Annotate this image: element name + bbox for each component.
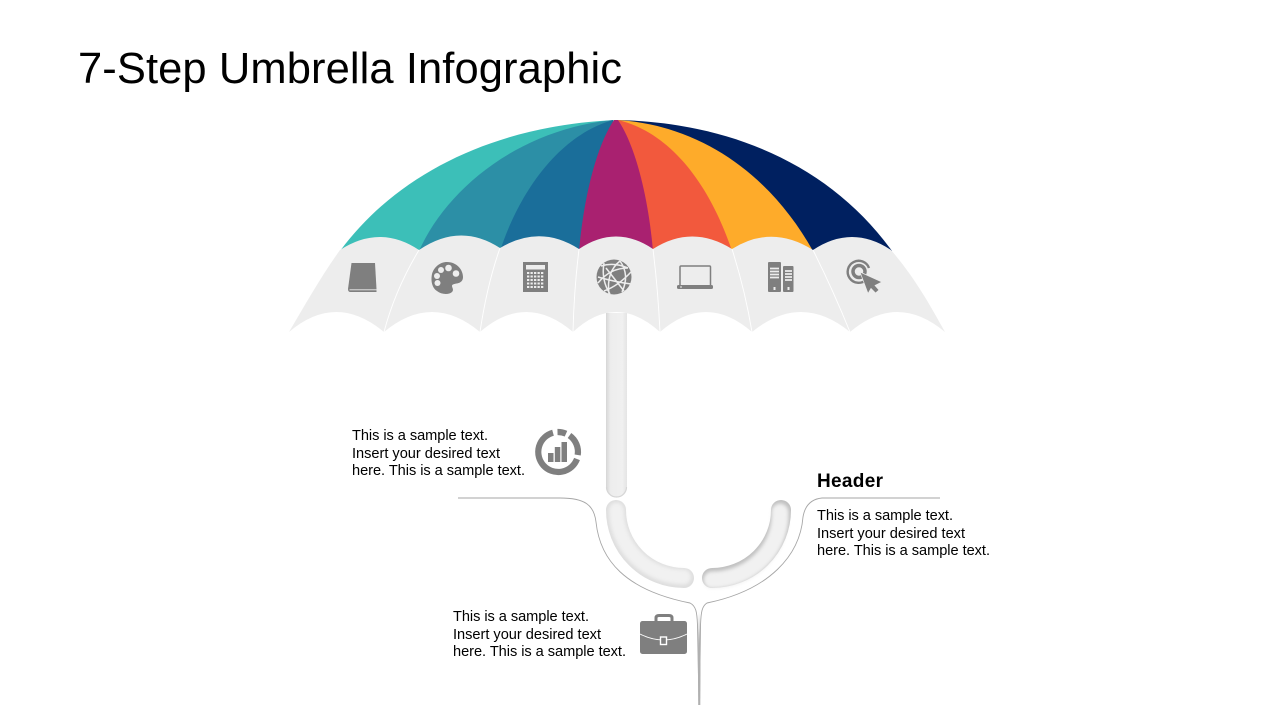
umbrella lower grey panels: [289, 235, 945, 332]
connector line left: [458, 498, 699, 705]
title: 7-Step Umbrella Infographic: [78, 45, 622, 93]
text block: upper left: This is a sample text.: [352, 428, 488, 444]
text block: lower left: [453, 609, 626, 660]
umbrella shaft: [606, 313, 627, 498]
icon: palette: [432, 262, 463, 294]
umbrella canopy: [340, 120, 892, 251]
text block: lower left: Insert your desired text: [453, 627, 601, 643]
canopy segment 7 navy: [616, 120, 892, 251]
text block: right: This is a sample text.: [817, 508, 953, 524]
canopy segment 2 steel teal: [419, 120, 616, 251]
canopy segment 4 magenta: [579, 120, 653, 251]
canopy segment 5 coral: [616, 120, 732, 251]
icon: globe: [596, 260, 632, 294]
handle hook left: [616, 510, 684, 578]
icon: book: [348, 263, 376, 292]
text block: upper left: [352, 428, 525, 479]
text block: lower left: This is a sample text.: [453, 609, 589, 625]
icon: donut chart with bars: [538, 432, 578, 472]
canopy segment 6 amber: [616, 120, 813, 251]
text block: upper left: here. This is a sample text.: [352, 463, 525, 479]
text block: lower left: here. This is a sample text.: [453, 644, 626, 660]
handle stem sliver: [698, 612, 700, 705]
connector line right: [700, 498, 940, 705]
header: right block: Header: [817, 471, 884, 492]
canopy segment 1 teal: [340, 120, 616, 251]
icon: calculator: [523, 262, 548, 292]
icon: target cursor: [848, 261, 882, 294]
icon: laptop: [677, 266, 713, 289]
text block: right: [817, 508, 990, 559]
text block: right: Insert your desired text: [817, 526, 965, 542]
text block: right: here. This is a sample text.: [817, 543, 990, 559]
handle hook right: [712, 510, 781, 580]
icon: server towers: [768, 262, 794, 292]
icon: briefcase: [640, 616, 687, 654]
canopy segment 3 blue: [500, 120, 616, 251]
text block: upper left: Insert your desired text: [352, 446, 500, 462]
